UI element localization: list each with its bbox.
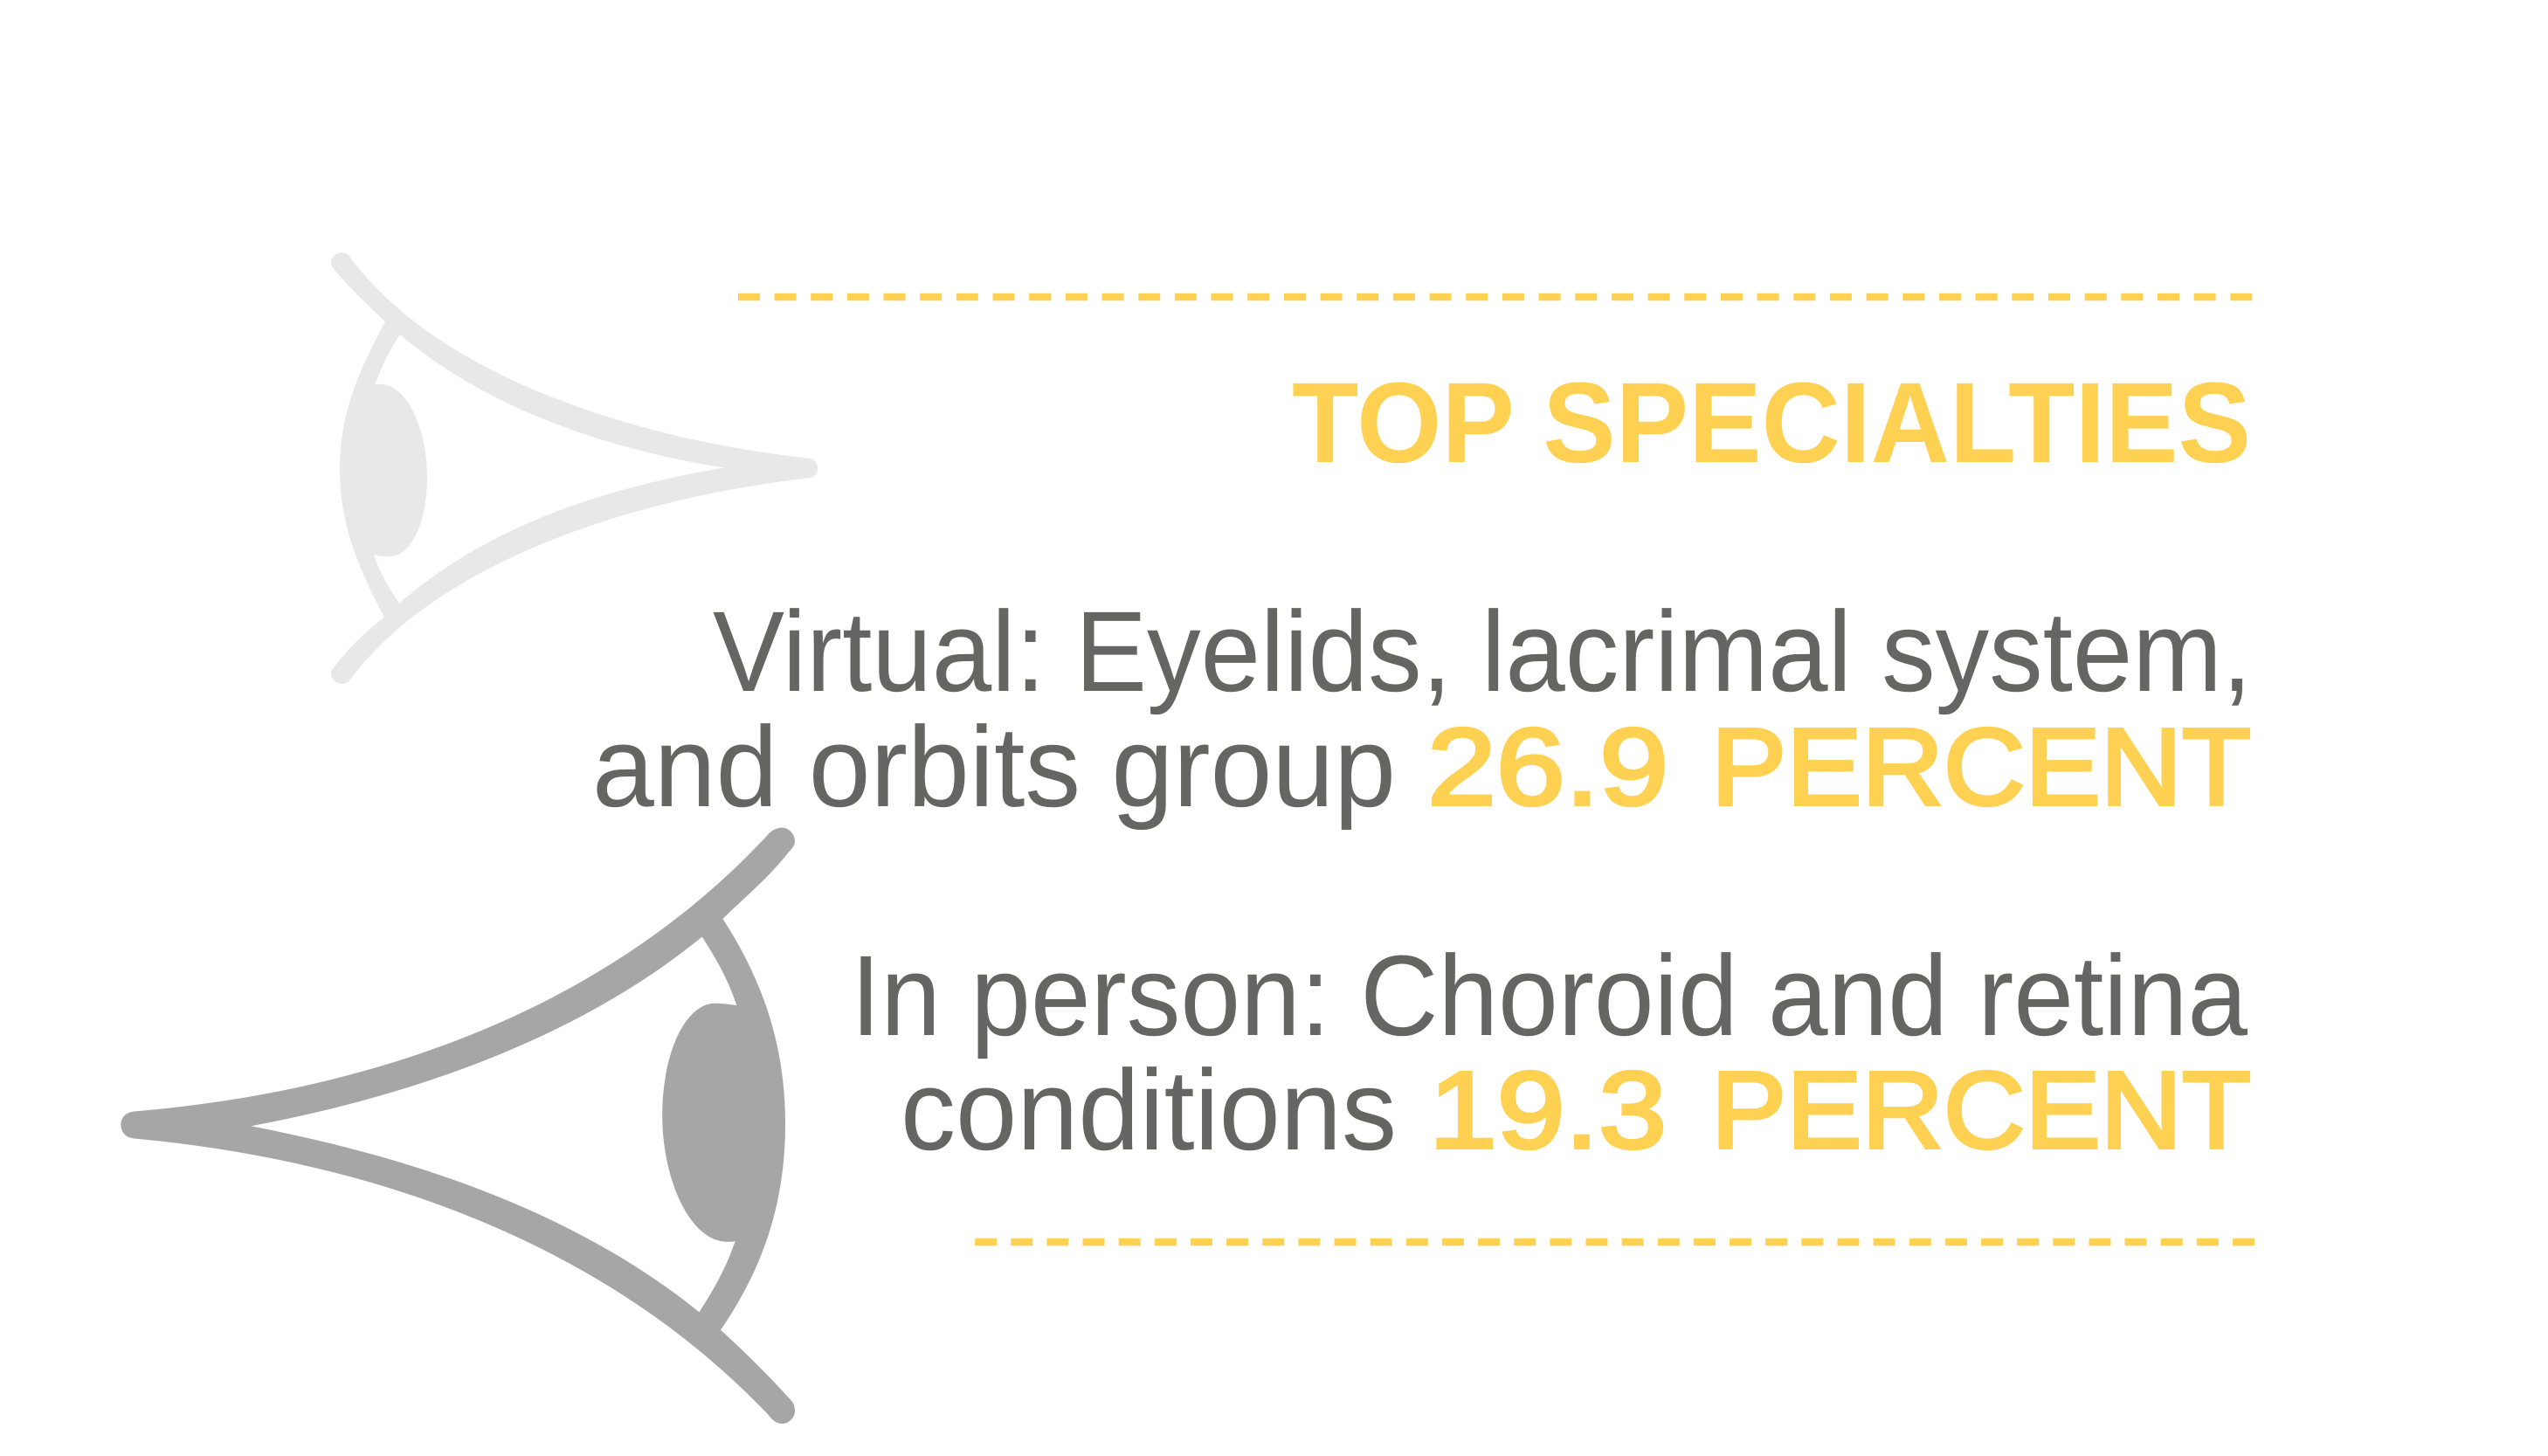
text block: in-person specialty: In person: Choroid and retina bbox=[851, 931, 2248, 1059]
text block: in-person specialty bbox=[851, 931, 2251, 1174]
stat: 19.3 percent: 19.3 bbox=[1429, 1050, 1667, 1171]
text block: virtual specialty: PERCENT bbox=[1711, 707, 2251, 828]
text block: in-person specialty: PERCENT bbox=[1711, 1050, 2251, 1171]
icon: light grey eye (virtual) bbox=[331, 252, 818, 684]
top dashed divider bbox=[738, 293, 2252, 300]
bottom dashed divider bbox=[975, 1239, 2255, 1246]
text block: virtual specialty bbox=[592, 587, 2252, 831]
text block: virtual specialty: Virtual: Eyelids, lacrimal system, bbox=[713, 587, 2252, 715]
stat: 26.9 percent: 26.9 bbox=[1427, 707, 1668, 828]
icon: dark grey eye (in person) bbox=[121, 828, 795, 1424]
text block: virtual specialty: and orbits group bbox=[592, 702, 1396, 831]
text block: in-person specialty: conditions bbox=[901, 1045, 1397, 1174]
title: TOP SPECIALTIES bbox=[1292, 358, 2251, 486]
